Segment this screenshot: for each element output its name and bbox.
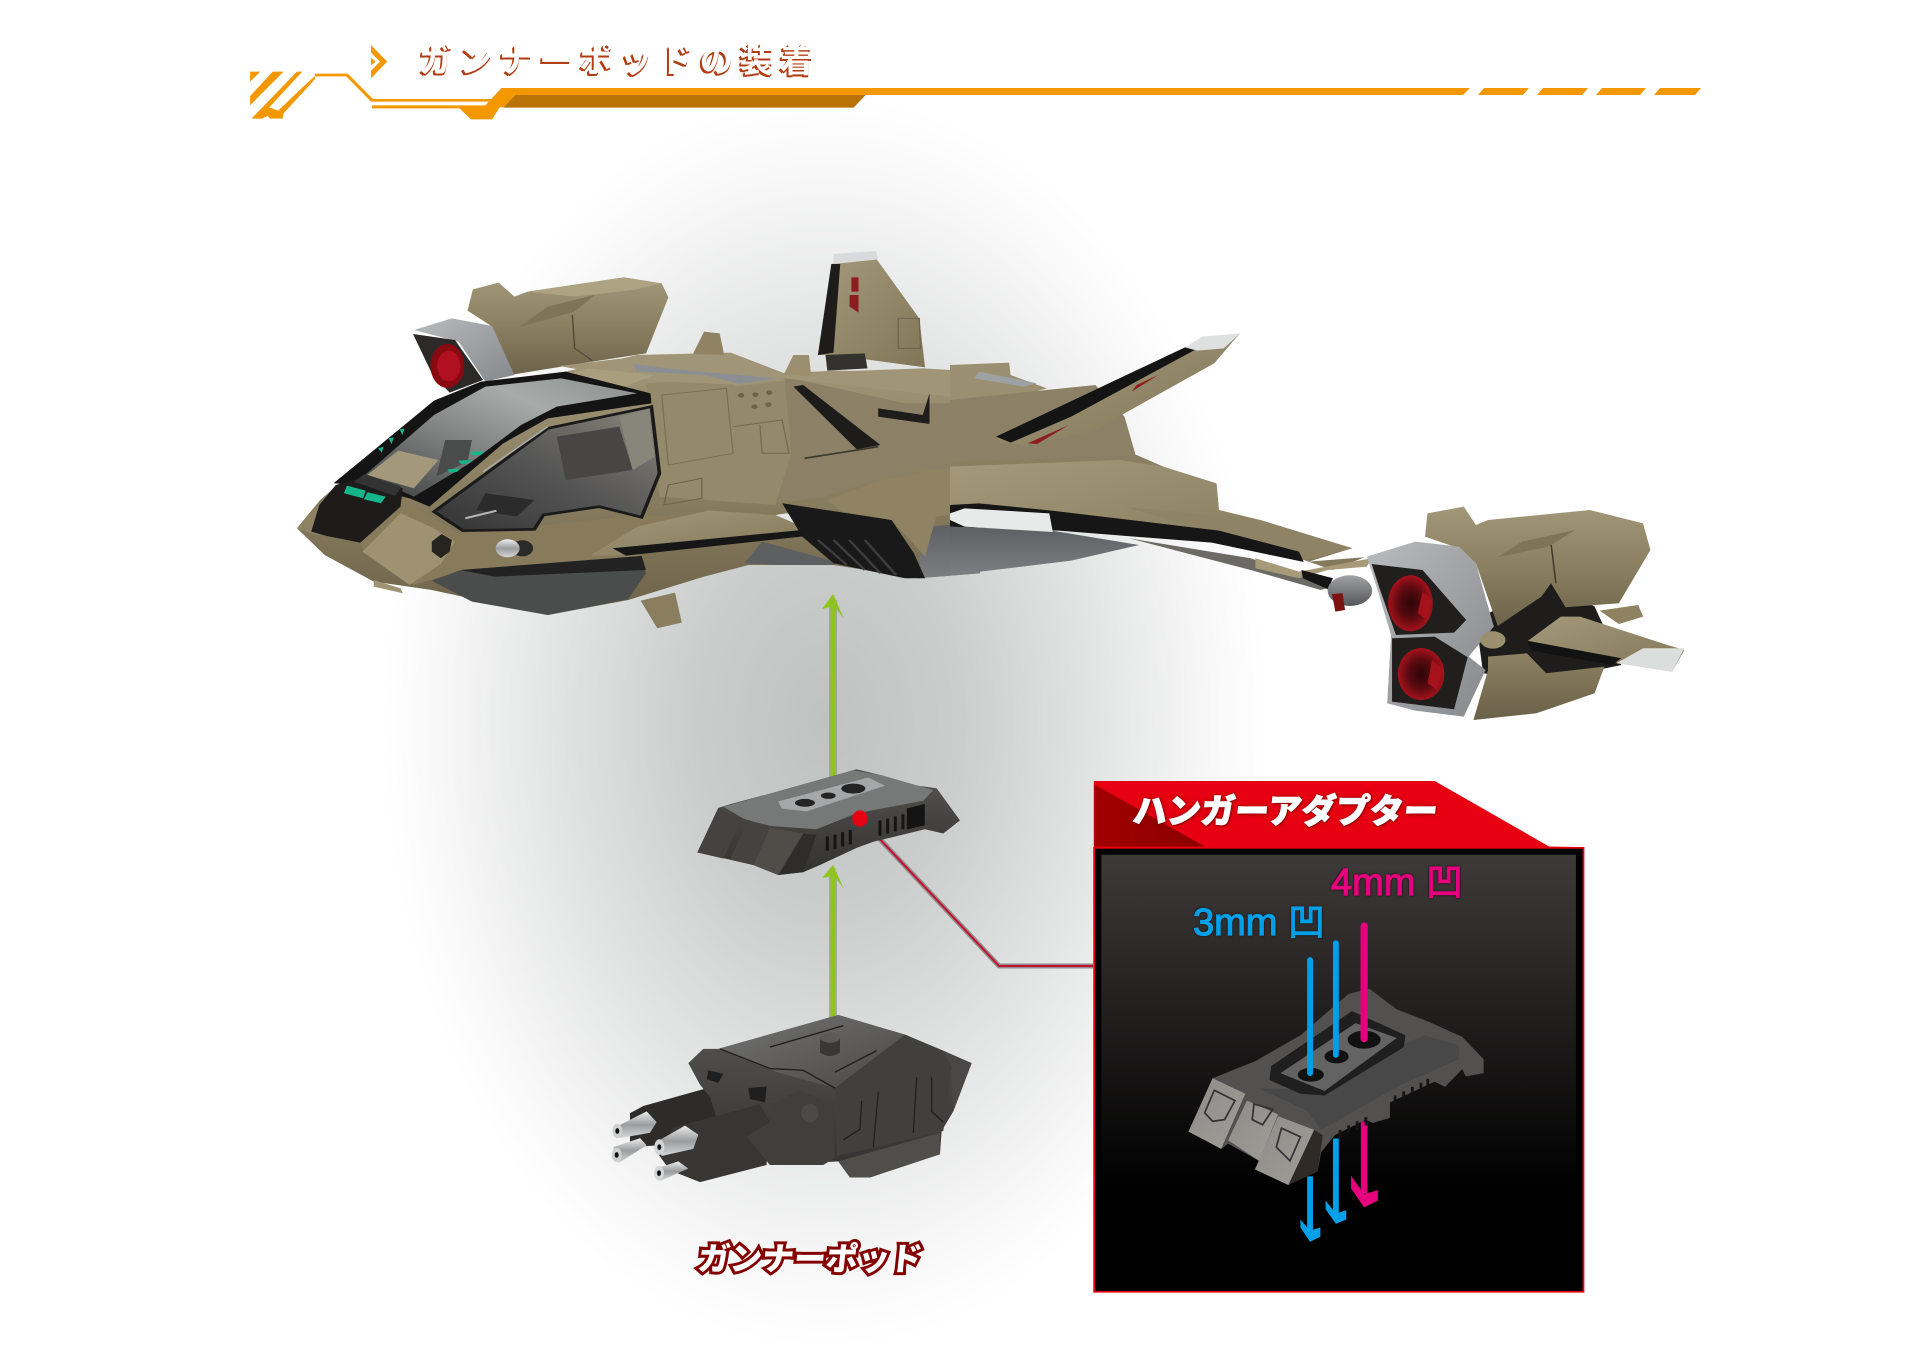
hull lower strip (360, 503, 704, 585)
icon: chevron (371, 45, 387, 78)
rear fuselage (950, 385, 1163, 507)
rear upper engine pod (413, 277, 668, 393)
arrows into holes (1310, 926, 1364, 1073)
side glass (434, 407, 659, 531)
label: hangar adapter heading: ハンガーアダプター (1131, 793, 1440, 831)
engine center hub (1476, 580, 1621, 682)
panel: hangar adapter (1094, 781, 1584, 1292)
adapter body (697, 769, 960, 875)
adapter large (1188, 989, 1484, 1185)
connector line (860, 818, 1093, 966)
heading line tail dashes (925, 88, 1701, 95)
ship: rear section (950, 333, 1684, 720)
landing strut (641, 593, 682, 628)
thin circuit lines (315, 75, 491, 107)
pod main block (688, 1015, 972, 1177)
engine pod lower shell (1473, 653, 1604, 720)
arrows below adapter (1300, 1121, 1378, 1242)
label: 3mm recess: 3mm 凹 (1193, 902, 1325, 944)
panel header tab (1094, 781, 1584, 849)
wing black strip (950, 503, 1304, 562)
belly (744, 523, 980, 578)
arrow: lower green (822, 865, 844, 1024)
pod panel lines (720, 1026, 943, 1147)
wing root (827, 467, 980, 557)
heading bar (250, 45, 930, 119)
top deck (559, 332, 980, 400)
canopy upper glass (365, 378, 637, 497)
arrow: upper green (822, 594, 844, 790)
swept fin (996, 333, 1240, 446)
ship: front fuselage (297, 251, 980, 628)
gunner pod (612, 1015, 972, 1182)
canopy frame (334, 372, 651, 507)
boom (1129, 538, 1372, 590)
pod ball joint (1328, 575, 1372, 612)
title: ガンナーポッドの装着 (419, 42, 820, 79)
white panel (950, 508, 1053, 532)
dark band (503, 95, 866, 108)
panel gradient (1101, 855, 1576, 1287)
adapter top plate (778, 777, 885, 811)
rear small wing (1527, 605, 1684, 672)
adapter vents (1340, 1079, 1428, 1138)
pod barrels rear (612, 1086, 733, 1163)
adapter front faces (697, 808, 817, 875)
main wing (950, 460, 1364, 570)
engine cowl (1367, 542, 1505, 717)
pod peg (820, 1032, 840, 1056)
side vents (662, 385, 930, 505)
lower glass (374, 556, 646, 615)
main hull (297, 353, 980, 615)
pod barrels front (654, 1070, 835, 1182)
belly gray (950, 527, 1139, 575)
hatch stripes (250, 72, 315, 119)
panel frame (1094, 848, 1584, 1292)
black intake (782, 503, 925, 578)
label: 4mm recess: 4mm 凹 (1331, 862, 1463, 904)
nose sensor ball (496, 539, 533, 557)
adapter faces (1188, 1078, 1323, 1185)
background glow (383, 96, 1267, 1348)
canopy panel (367, 451, 438, 488)
red marker dot (852, 810, 868, 827)
tail fin (818, 251, 925, 371)
label: gunner pod: ガンナーポッド (696, 1241, 924, 1277)
thick orange band (372, 88, 930, 119)
hangar adapter small (697, 769, 960, 875)
adapter plate (1269, 1011, 1405, 1095)
engine pod upper shell (1425, 507, 1650, 626)
side strake (590, 511, 838, 556)
adapter vents (827, 806, 923, 851)
nose (297, 474, 455, 585)
rear top fin (950, 363, 1047, 407)
teal indicators (378, 429, 484, 473)
